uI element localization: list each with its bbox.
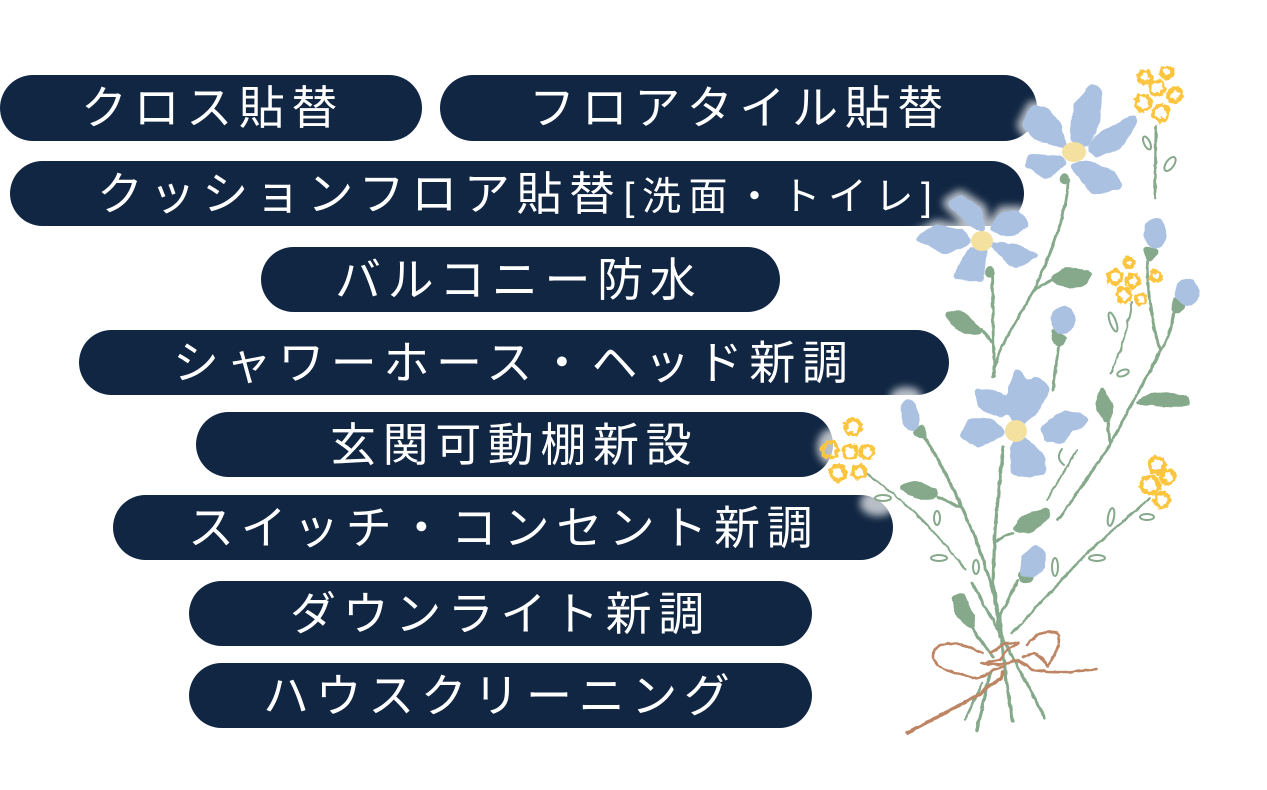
pill: cross: クロス貼替: [81, 82, 344, 134]
yellow blossoms: [822, 66, 1182, 507]
pill: cushion floor: クッションフロア貼替[洗面・トイレ]: [97, 168, 939, 220]
flower centers: [971, 142, 1086, 442]
pill: cushion floor: [10, 161, 1024, 226]
pill: switch outlet: スイッチ・コンセント新調: [188, 502, 819, 554]
pill: house cleaning: [189, 663, 812, 728]
pill: downlight: [189, 581, 812, 646]
pill: entrance shelf: [196, 412, 833, 477]
pill: downlight: ダウンライト新調: [290, 588, 711, 640]
pill: floor tile: フロアタイル貼替: [529, 82, 950, 134]
green leaves and calyxes: [900, 175, 1188, 628]
pill: cross: [0, 75, 422, 141]
open leaf outlines: [875, 135, 1178, 576]
pill: switch outlet: [113, 495, 893, 560]
ribbon bow: [907, 632, 1097, 733]
pill: balcony: バルコニー防水: [335, 254, 702, 306]
pill: house cleaning: ハウスクリーニング: [263, 670, 736, 722]
pill: floor tile: [440, 75, 1037, 141]
pill: shower: [79, 330, 949, 395]
stems: [865, 127, 1174, 730]
pill: shower: シャワーホース・ヘッド新調: [173, 337, 854, 389]
pill: balcony: [261, 247, 780, 312]
white glow over pills: [824, 108, 1065, 509]
pill: entrance shelf: 玄関可動棚新設: [330, 419, 698, 471]
blue petals and buds: [901, 87, 1197, 575]
